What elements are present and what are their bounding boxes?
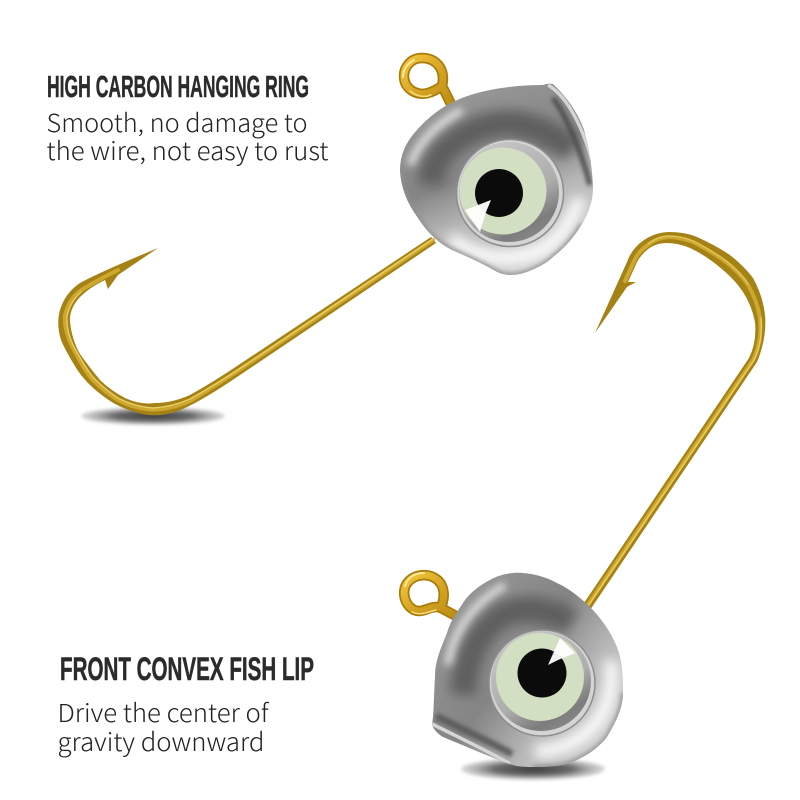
text block: lip description: gravity downward bbox=[58, 723, 264, 759]
jig head with lip bbox=[400, 84, 593, 275]
jig head with lip bbox=[432, 573, 623, 767]
eye highlight bbox=[465, 200, 491, 232]
hanging ring bbox=[403, 58, 453, 108]
text block: smooth ring description: Smooth, no damage to bbox=[46, 104, 308, 140]
eye socket bbox=[456, 140, 564, 246]
heading: front convex fish lip: FRONT CONVEX FISH LIP bbox=[60, 651, 314, 687]
hanging ring bbox=[404, 573, 458, 617]
head shadow bbox=[461, 758, 605, 780]
eye pupil bbox=[475, 169, 523, 217]
hook wire and bend bbox=[584, 232, 765, 610]
eye iris bbox=[496, 633, 584, 721]
hook wire and bend bbox=[58, 237, 436, 415]
bottom jig hook bbox=[404, 232, 765, 780]
eye pupil bbox=[518, 648, 566, 698]
hook shadow bbox=[81, 407, 225, 425]
heading: high carbon hanging ring: HIGH CARBON HANGING RING bbox=[47, 69, 309, 104]
eye highlight bbox=[548, 638, 575, 665]
eye iris bbox=[460, 148, 546, 234]
eye socket bbox=[489, 630, 595, 736]
text block: smooth ring description: the wire, not easy to rust bbox=[46, 132, 329, 168]
top jig hook bbox=[58, 58, 593, 425]
text block: lip description: Drive the center of bbox=[58, 694, 270, 730]
